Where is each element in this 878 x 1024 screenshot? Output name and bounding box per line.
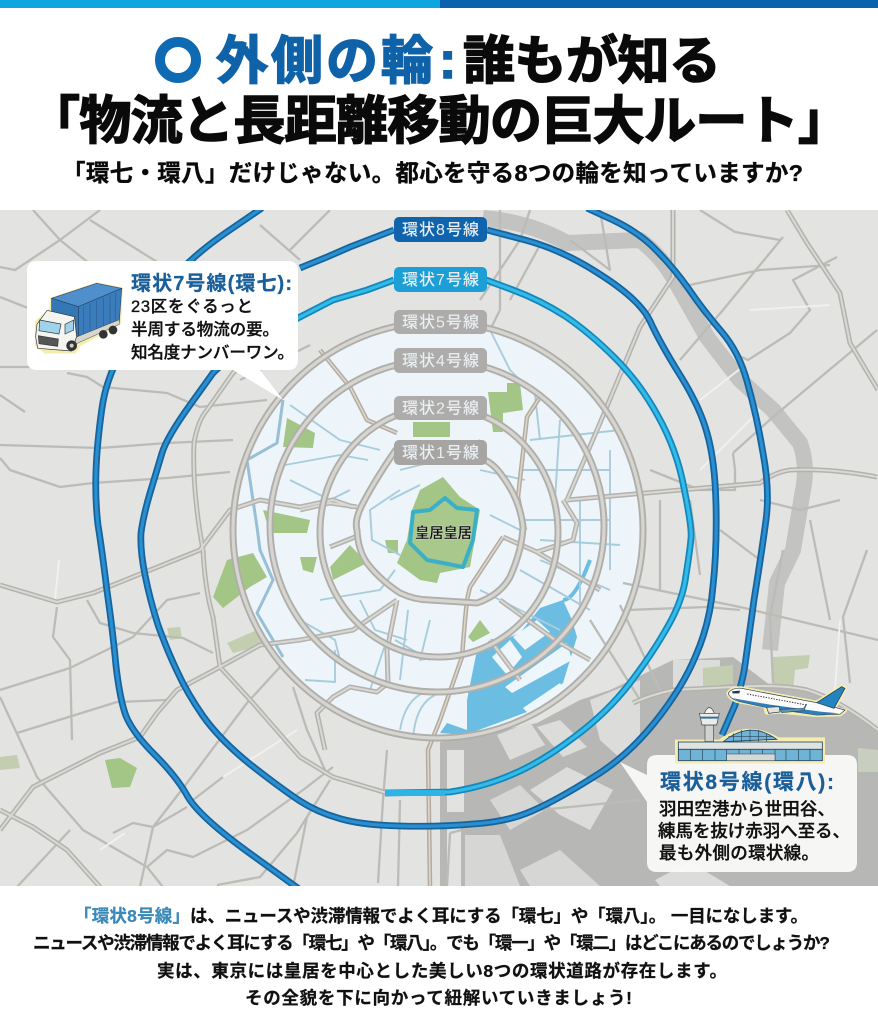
callout box with tail xyxy=(27,261,298,400)
road label: ring 7: 環状7号線 xyxy=(402,271,479,289)
ring 7 bottom-left segment highlight xyxy=(385,790,445,796)
palace label: 皇居皇居 xyxy=(415,525,472,542)
title xyxy=(28,32,850,151)
road label: ring 2 xyxy=(394,396,487,420)
river upper reach xyxy=(430,220,510,236)
rest of line 1: は、ニュースや渋滞情報でよく耳にする「環七」や「環八」。 一目になします。 xyxy=(190,906,808,926)
callout: ring 8 xyxy=(620,755,857,872)
callout heading: 環状7号線(環七): xyxy=(131,272,292,295)
road label: ring 1: 環状1号線 xyxy=(402,444,479,462)
callout body: 羽田空港から世田谷、 xyxy=(659,799,835,819)
road label: ring 2: 環状2号線 xyxy=(402,400,479,418)
callout box with tail xyxy=(620,755,857,872)
moat river branch xyxy=(247,400,283,657)
icon: airplane xyxy=(728,687,845,715)
road label: ring 7 xyxy=(394,267,487,292)
icon: blue ring xyxy=(160,42,196,78)
bay and port land xyxy=(440,657,878,886)
ring road 7 xyxy=(285,280,691,793)
pale highlight roads xyxy=(55,305,840,850)
pale parks xyxy=(0,627,810,770)
intro text xyxy=(33,906,830,1008)
imperial palace park xyxy=(397,477,480,583)
map panel xyxy=(0,208,878,889)
road label: ring 4 xyxy=(394,348,487,373)
highlighted road name: 「環状8号線」 xyxy=(74,906,190,926)
river xyxy=(483,218,805,650)
parks xyxy=(105,383,523,788)
top colour bar xyxy=(0,0,878,8)
inner city streets and canals xyxy=(285,330,620,740)
arterial roads xyxy=(0,210,878,887)
callout body xyxy=(658,799,850,863)
callout body: 練馬を抜け赤羽へ至る、 xyxy=(658,821,850,841)
tan radial roads xyxy=(320,350,540,886)
callout body: 半周する物流の要。 xyxy=(131,320,279,339)
icon: airport terminal xyxy=(676,707,824,763)
callout heading: 環状8号線(環八): xyxy=(660,771,834,794)
callout: ring 7 xyxy=(27,261,298,400)
subtitle: 「環七・環八」だけじゃない。都心を守る8つの輪を知っていますか? xyxy=(62,160,803,186)
line 4: その全貌を下に向かって紐解いていきましょう! xyxy=(245,988,632,1008)
road label: ring 1 xyxy=(394,440,487,465)
callout body xyxy=(131,297,294,362)
callout body: 23区をぐるっと xyxy=(131,297,253,316)
road label: ring 4: 環状4号線 xyxy=(402,352,479,370)
minor roads xyxy=(0,210,878,887)
title black part: 誰もが知る xyxy=(463,33,721,91)
ring roads 1 2 4 5 xyxy=(233,322,643,738)
line 2: ニュースや渋滞情報でよく耳にする「環七」や「環八」。でも「環一」や「環二」はどこにあるのでしょうか? xyxy=(33,933,830,953)
inner city light area xyxy=(233,322,643,738)
callout body: 最も外側の環状線。 xyxy=(659,843,819,863)
road label: ring 8: 環状8号線 xyxy=(402,221,479,239)
ring road 8 xyxy=(96,208,767,889)
palace moat xyxy=(410,498,477,567)
callout body: 知名度ナンバーワン。 xyxy=(131,343,294,362)
icon: truck xyxy=(36,283,122,352)
road label: ring 5 xyxy=(394,310,487,334)
line 3: 実は、東京には皇居を中心とした美しい8つの環状道路が存在します。 xyxy=(157,961,727,981)
bay water xyxy=(440,560,590,735)
title second line: 「物流と長距離移動の巨大ルート」 xyxy=(28,93,850,151)
map background xyxy=(0,210,878,886)
road label: ring 5: 環状5号線 xyxy=(402,314,479,332)
road label: ring 8 xyxy=(394,217,487,242)
line 1 xyxy=(74,906,808,926)
title blue part: 外側の輪 xyxy=(216,33,433,91)
title colon: : xyxy=(439,32,456,90)
